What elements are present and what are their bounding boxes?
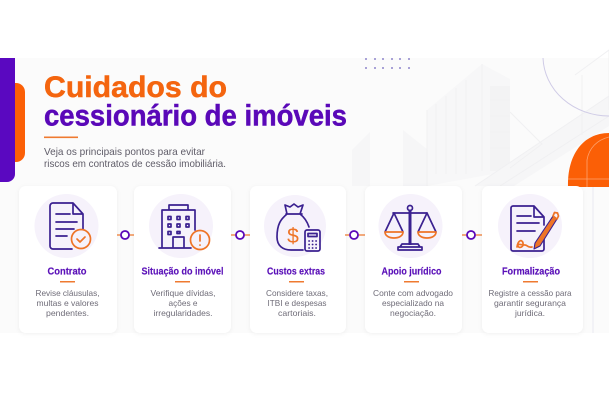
card: Custos extras: Considere taxas, <box>266 289 328 298</box>
card: Situação do imóvel: Situação do imóvel <box>142 266 224 278</box>
card: Apoio jurídico <box>365 186 462 333</box>
card: Apoio jurídico: especializado na <box>382 299 444 308</box>
card: Formalização: jurídica. <box>514 309 545 318</box>
icon: building with warning <box>159 205 210 250</box>
decorative thin circle <box>543 58 609 116</box>
subtitle <box>44 147 226 170</box>
subtitle: Veja os principais pontos para evitar <box>44 147 206 158</box>
card: Contrato: multas e valores <box>36 299 98 308</box>
orange quarter circle decoration <box>568 133 609 187</box>
icon: money bag with calculator: $ <box>287 225 299 248</box>
card: Situação do imóvel: irregularidades. <box>154 309 212 318</box>
title <box>44 71 347 132</box>
icon: scales of justice <box>385 206 436 250</box>
card: Contrato <box>19 186 117 333</box>
card: Formalização: Formalização <box>502 266 560 278</box>
title: cessionário de imóveis <box>44 100 347 132</box>
icon: money bag with calculator <box>277 204 320 251</box>
card: Custos extras: Custos extras <box>267 266 325 278</box>
title: Cuidados do <box>44 71 227 104</box>
background: building line art <box>352 50 609 186</box>
card: Custos extras: cartoriais. <box>278 309 316 318</box>
card: Formalização <box>482 186 583 333</box>
subtitle: riscos em contratos de cessão imobiliária. <box>44 159 226 170</box>
card: Custos extras <box>250 186 346 333</box>
card: Contrato: Revise cláusulas, <box>36 289 100 298</box>
card: Situação do imóvel: Verifique dívidas, <box>150 289 216 298</box>
title underline <box>44 136 78 138</box>
card: Apoio jurídico: Conte com advogado <box>373 289 453 298</box>
left orange accent block <box>0 83 25 162</box>
connector 1 <box>117 231 136 239</box>
right vertical line <box>592 187 594 333</box>
left purple accent block <box>0 58 15 182</box>
icon: contract and pen <box>511 206 558 251</box>
card: Apoio jurídico: negociação. <box>390 309 436 318</box>
card: Custos extras: ITBI e despesas <box>268 299 326 308</box>
connector 2 <box>231 231 250 239</box>
card: Situação do imóvel: ações e <box>168 299 198 308</box>
connector 4 <box>462 231 482 239</box>
decorative dot grid <box>365 58 410 69</box>
card: Apoio jurídico: Apoio jurídico <box>382 266 442 278</box>
icon: document with check <box>50 203 90 249</box>
background band <box>0 58 609 333</box>
card: Formalização: garantir segurança <box>494 299 566 308</box>
card: Situação do imóvel <box>134 186 231 333</box>
card: Contrato: Contrato <box>48 266 86 278</box>
connector 3 <box>345 231 365 239</box>
card: Formalização: Registre a cessão para <box>488 289 572 298</box>
card: Contrato: pendentes. <box>46 309 89 318</box>
